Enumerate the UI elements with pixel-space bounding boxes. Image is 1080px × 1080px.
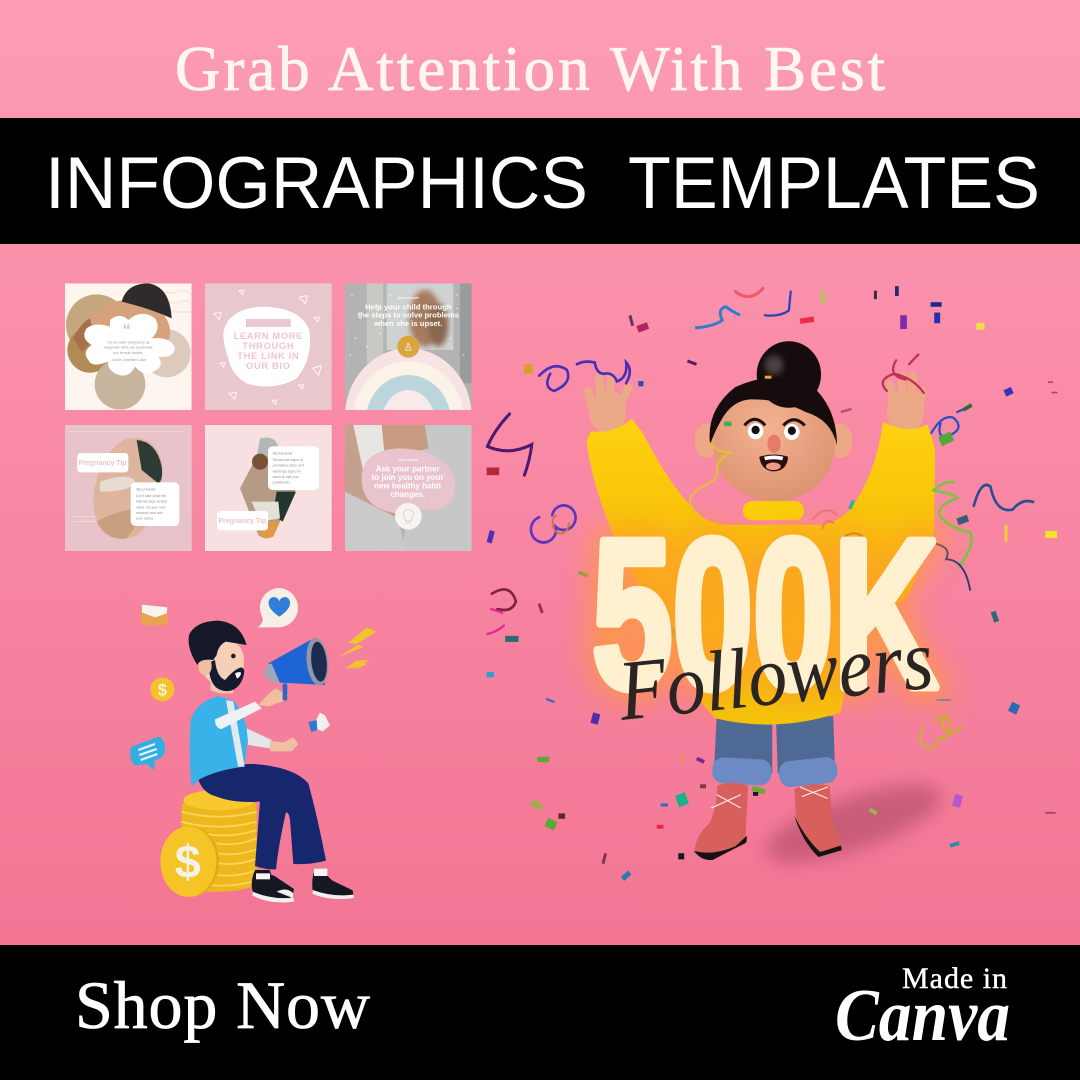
thumbnail 2: learn more: THE LINK IN (237, 351, 299, 361)
thumbnail 3: rainbow (345, 283, 472, 410)
speech blob (362, 448, 455, 513)
thumbnail 2: learn more: OUR BIO (246, 361, 291, 371)
far arm and fist (247, 728, 298, 751)
boots (694, 783, 842, 860)
thumbnail 6: ask your partner: to join you on your (372, 473, 444, 482)
thumbnail 4: pregnancy tip: Don't take what the (136, 494, 166, 498)
head (695, 341, 852, 501)
thumbnail 5: pregnancy tip diamond: practitioner. (273, 481, 291, 485)
thumbnail 4: pregnancy tip: value. Do your own (136, 505, 166, 509)
confetti pieces (487, 286, 1057, 881)
thumbnail 6: ask your partner: @yourhandle (398, 458, 418, 462)
thumbnail 5: pregnancy tip diamond: Review the signs of (273, 458, 303, 462)
thumbnail 6: ask your partner: Ask your partner (376, 464, 440, 473)
illustration: celebrating character with 500K (487, 286, 1057, 881)
thumbnail 6: ask your partner: new healthy habit (374, 482, 441, 491)
coin stack (181, 790, 257, 892)
thumbnail 5: pregnancy tip diamond: Pregnancy Tip (218, 518, 266, 525)
Made in Canva badge: Made in (902, 962, 1007, 995)
floor shadow (758, 768, 950, 878)
big dollar coin (160, 826, 219, 897)
thumbnail 6: ask your partner (345, 425, 472, 551)
icon: chat bubble (130, 737, 165, 770)
top heading: Grab Attention With Best: Grab Attention With Best (175, 34, 885, 104)
yellow sweater (587, 419, 935, 725)
icon: dollar coin: $ (158, 680, 168, 699)
thumbnail 1: flower quote (65, 283, 192, 410)
near arm and fist (215, 688, 288, 729)
thumbnail 1: flower quote: “ (123, 321, 131, 340)
thumbnail 1: flower quote: our female bodies. (113, 351, 143, 355)
thumbnail 5: pregnancy tip diamond: @yourhandle (273, 452, 293, 456)
thumbnail 5: pregnancy tip diamond: warnings signs for (273, 469, 302, 473)
icon: lightning bolts (338, 628, 377, 670)
thumbnail 5: pregnancy tip diamond: premature labor and (273, 464, 304, 468)
icon: envelope (141, 605, 167, 625)
shoes (252, 869, 354, 903)
thumbnail 3: rainbow: ♙ (404, 341, 413, 353)
confetti ribbons (487, 288, 1033, 748)
shorts (712, 716, 838, 788)
icon: dollar coin (150, 677, 174, 701)
thumbnail 5: pregnancy tip diamond (205, 425, 332, 551)
thumbnail 3: rainbow: @yourhandle (397, 296, 419, 300)
thumbnail 4: pregnancy tip: Pregnancy Tip (79, 460, 127, 467)
thumbnail 2: learn more: THROUGH (242, 341, 294, 351)
panel: six template thumbnails (65, 283, 472, 551)
white shirt placket (226, 700, 245, 767)
black footer banner (0, 945, 1080, 1080)
flower quote blob (84, 314, 175, 376)
black title banner (0, 118, 1080, 244)
black title banner: INFOGRAPHICS (45, 143, 588, 224)
head and beard (189, 621, 247, 693)
trousers (198, 764, 326, 869)
thumbnail 6: ask your partner: changes. (390, 490, 425, 499)
thumbnail 1: flower quote: enjoyable while we appreciate (104, 346, 153, 350)
thumbnail 5: pregnancy tip diamond: when to call your (273, 475, 300, 479)
thumbnail 3: rainbow: when she is upset. (373, 319, 442, 328)
icon: heart speech bubble (258, 588, 298, 627)
shirt (190, 696, 248, 787)
sweater collar (743, 501, 804, 520)
megaphone (264, 637, 330, 701)
illustration: man with megaphone on coins (130, 588, 377, 903)
thumbnail 2: learn more (205, 283, 332, 410)
big dollar coin: $ (175, 835, 201, 887)
footer call to action: Shop Now: Shop Now (75, 967, 370, 1043)
script word: Followers: Followers (613, 610, 937, 739)
thumbnail 4: pregnancy tip: your doctor. (136, 517, 154, 521)
thumbnail 3: rainbow: Help your child through (365, 302, 452, 311)
Made in Canva badge: Canva (835, 975, 1010, 1057)
icon: thumbs up (308, 713, 330, 732)
hands (588, 376, 924, 434)
thumbnail 4: pregnancy tip: research and ask (136, 511, 163, 515)
thumbnail 4: pregnancy tip (65, 425, 192, 551)
thumbnail 1: flower quote: - Marie Josefsen Lake (110, 358, 146, 362)
thumbnail 4: pregnancy tip: internet says at face (136, 500, 167, 504)
thumbnail 1: flower quote: Let us make pregnancy as (107, 340, 150, 344)
thumbnail 3: rainbow: the steps to solve problems (358, 311, 459, 320)
black title banner: TEMPLATES (628, 143, 1040, 224)
thumbnail 4: pregnancy tip: @yourhandle (136, 488, 156, 492)
thumbnail 2: learn more: LEARN MORE (234, 331, 303, 341)
